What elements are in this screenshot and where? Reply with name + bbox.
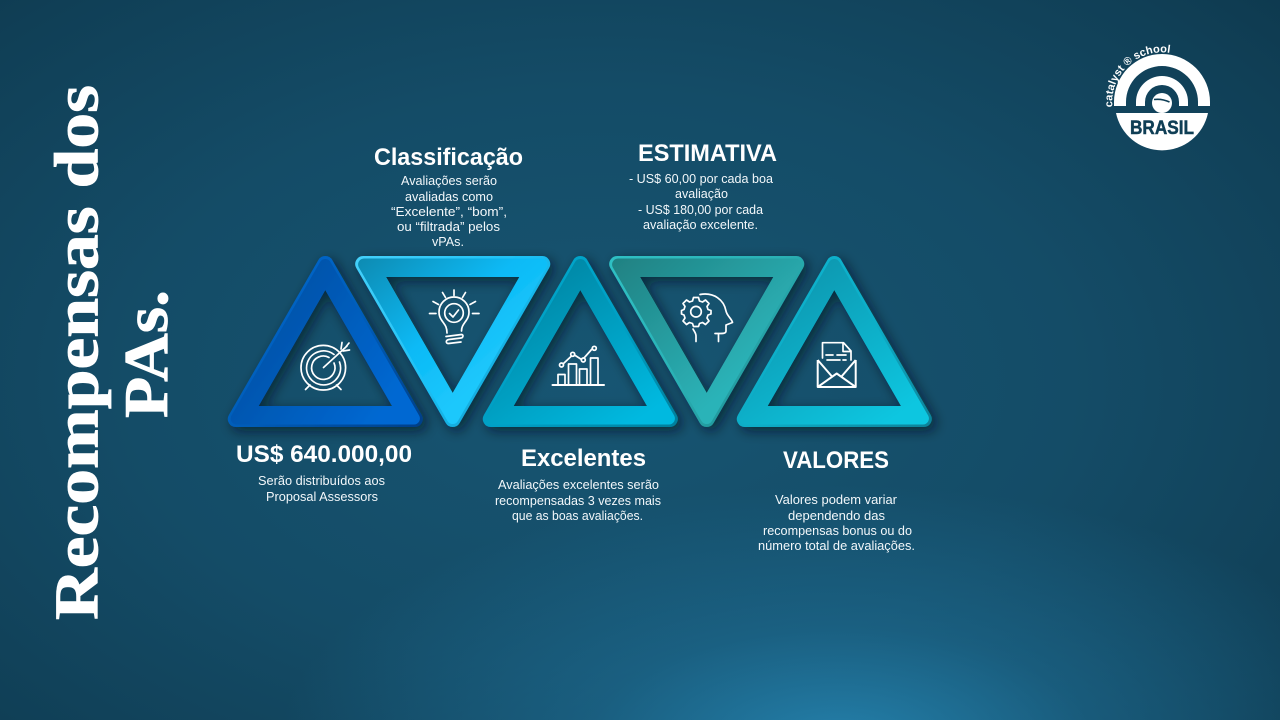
- body: número total de avaliações.: [758, 539, 915, 553]
- logo: catalyst school Brasil: catalyst ® school: [1106, 44, 1170, 107]
- logo curved text: [1112, 52, 1190, 107]
- body: dependendo das: [788, 509, 885, 523]
- heading: Classificação: [374, 144, 523, 171]
- heading: Excelentes: [521, 445, 646, 472]
- logo: catalyst school Brasil: [1106, 44, 1210, 150]
- text block: Excelentes: [495, 445, 661, 523]
- body: [258, 474, 385, 504]
- body: avaliação: [675, 187, 728, 201]
- body: Avaliações serão: [401, 174, 497, 188]
- body: Avaliações excelentes serão: [498, 478, 659, 492]
- icon: head with gear: [682, 294, 732, 342]
- logo lower badge: [1116, 113, 1208, 150]
- icon: target with arrow: [301, 342, 350, 390]
- triangle 5: light teal: [737, 256, 932, 427]
- body: recompensadas 3 vezes mais: [495, 494, 661, 508]
- body: avaliadas como: [405, 190, 493, 204]
- body: [495, 478, 661, 523]
- body: que as boas avaliações.: [512, 509, 643, 523]
- body: - US$ 60,00 por cada boa: [629, 172, 773, 186]
- body: Serão distribuídos aos: [258, 474, 385, 488]
- text block: US$ 640.000,00: [236, 441, 412, 504]
- body: ou “filtrada” pelos: [397, 220, 500, 234]
- title: PAs.: [113, 290, 181, 418]
- triangle 3: cyan: [483, 256, 678, 427]
- heading: US$ 640.000,00: [236, 441, 412, 468]
- text block: VALORES: [758, 447, 915, 553]
- logo arches: [1114, 54, 1210, 106]
- logo centre dial: [1152, 93, 1172, 113]
- body: recompensas bonus ou do: [763, 524, 912, 538]
- body: Valores podem variar: [775, 493, 897, 507]
- text block: Classificação: [374, 144, 523, 249]
- body: [758, 493, 915, 553]
- text block: ESTIMATIVA: [629, 140, 777, 232]
- triangle 1: blue: [228, 256, 423, 427]
- logo wordmark: BRASIL: [1130, 118, 1194, 139]
- body: avaliação excelente.: [643, 218, 758, 232]
- title: Recompensas dos: [44, 85, 112, 620]
- body: “Excelente”, “bom”,: [391, 205, 507, 219]
- icon: envelope with document: [818, 343, 856, 387]
- heading: ESTIMATIVA: [638, 140, 777, 167]
- icon: bar chart with trend line: [552, 346, 604, 385]
- body: vPAs.: [432, 235, 464, 249]
- triangle 2: sky blue: [355, 256, 550, 427]
- icon: light bulb with check: [430, 290, 479, 344]
- body: - US$ 180,00 por cada: [638, 203, 763, 217]
- title: [44, 85, 181, 620]
- body: [629, 172, 773, 232]
- triangle 4: teal: [609, 256, 804, 427]
- body: [391, 174, 507, 249]
- heading: VALORES: [783, 447, 889, 474]
- body: Proposal Assessors: [266, 490, 378, 504]
